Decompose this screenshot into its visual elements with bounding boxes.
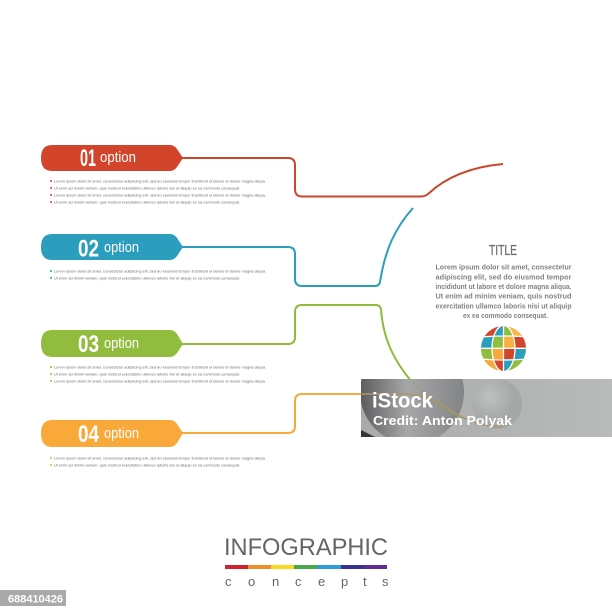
bullet text 01: Lorem ipsum dolor sit amet, consectetur adipiscing elit, sed do eiusmod tempor incididunt ut labore et dolore magna aliqua. bbox=[54, 193, 266, 197]
bullet text 04: Lorem ipsum dolor sit amet, consectetur adipiscing elit, sed do eiusmod tempor incididunt ut labore et dolore magna aliqua. bbox=[54, 456, 266, 460]
logo subheading: p bbox=[341, 574, 348, 589]
bullet text 03: Lorem ipsum dolor sit amet, consectetur adipiscing elit, sed do eiusmod tempor incididunt ut labore et dolore magna aliqua. bbox=[54, 365, 266, 369]
logo subheading: o bbox=[248, 574, 255, 589]
description text: adipiscing elit, sed do eiusmod tempor bbox=[436, 272, 572, 281]
label pill 03 bbox=[41, 330, 183, 357]
description text: exercitation ullamco laboris nisi ut aliquip bbox=[436, 301, 572, 310]
connector: orange bbox=[180, 394, 361, 433]
connector: blue bbox=[180, 208, 413, 286]
logo subheading: c bbox=[225, 574, 232, 589]
logo subheading: s bbox=[382, 574, 389, 589]
option label 02: option bbox=[104, 239, 139, 256]
bullet text 01: Ut enim ad minim veniam, quis nostrud exercitation ullamco laboris nisi ut aliquip ex ea commodo consequat. bbox=[54, 186, 240, 190]
logo subheading: c bbox=[295, 574, 302, 589]
rainbow bar bbox=[225, 565, 387, 569]
number 04: 04 bbox=[78, 421, 100, 448]
number 03: 03 bbox=[78, 331, 99, 358]
description text: Ut enim ad minim veniam, quis nostrud bbox=[436, 292, 572, 301]
bullet text 02 bbox=[50, 269, 266, 280]
panel: option 01 bbox=[41, 145, 266, 204]
bullet text 01: Lorem ipsum dolor sit amet, consectetur adipiscing elit, sed do eiusmod tempor incididunt ut labore et dolore magna aliqua. bbox=[54, 179, 266, 183]
logo: infographic concepts bbox=[224, 534, 389, 589]
description text bbox=[436, 262, 572, 320]
option label 03: option bbox=[104, 335, 139, 352]
panel: option 04 bbox=[41, 420, 266, 467]
label pill 01 bbox=[41, 145, 183, 171]
panel: option 02 bbox=[41, 234, 266, 280]
description text: Lorem ipsum dolor sit amet, consectetur bbox=[436, 262, 572, 272]
bullet text 04 bbox=[50, 456, 266, 467]
panel: option 03 bbox=[41, 330, 266, 383]
watermark banner bbox=[361, 379, 612, 437]
panel: title block bbox=[436, 242, 572, 372]
label pill 02 bbox=[41, 234, 183, 260]
bullet text 02: Ut enim ad minim veniam, quis nostrud exercitation ullamco laboris nisi ut aliquip ex ea commodo consequat. bbox=[54, 276, 240, 280]
bullet text 04: Ut enim ad minim veniam, quis nostrud exercitation ullamco laboris nisi ut aliquip ex ea commodo consequat. bbox=[54, 463, 240, 467]
logo subheading: n bbox=[272, 574, 279, 589]
icon: globe bbox=[481, 326, 526, 371]
bullet text 03: Lorem ipsum dolor sit amet, consectetur adipiscing elit, sed do eiusmod tempor incididunt ut labore et dolore magna aliqua. bbox=[54, 379, 266, 383]
logo subheading: t bbox=[363, 574, 367, 589]
connector: green bbox=[180, 305, 412, 382]
description text: incididunt ut labore et dolore magna aliqua. bbox=[436, 282, 572, 291]
logo heading: INFOGRAPHIC bbox=[224, 534, 388, 561]
title: TITLE bbox=[489, 242, 517, 259]
watermark credit: Credit: Anton Polyak bbox=[373, 414, 512, 428]
option label 04: option bbox=[104, 425, 139, 442]
logo subheading: e bbox=[318, 574, 325, 589]
bullet text 02: Lorem ipsum dolor sit amet, consectetur adipiscing elit, sed do eiusmod tempor incididunt ut labore et dolore magna aliqua. bbox=[54, 269, 266, 273]
bullet text 01: Ut enim ad minim veniam, quis nostrud exercitation ullamco laboris nisi ut aliquip ex ea commodo consequat. bbox=[54, 200, 240, 204]
number 02: 02 bbox=[78, 236, 99, 262]
description text: ex ea commodo consequat. bbox=[463, 311, 548, 320]
watermark text: iStock bbox=[372, 390, 433, 412]
image id badge bbox=[0, 590, 66, 606]
image id: 688410426 bbox=[8, 594, 63, 606]
label pill 04 bbox=[41, 420, 183, 447]
number 01: 01 bbox=[80, 145, 96, 172]
option label 01: option bbox=[100, 149, 136, 166]
logo subheading bbox=[225, 574, 389, 589]
bullet text 03: Ut enim ad minim veniam, quis nostrud exercitation ullamco laboris nisi ut aliquip ex ea commodo consequat. bbox=[54, 372, 240, 376]
connector: red bbox=[180, 158, 503, 196]
bullet text 01 bbox=[50, 179, 266, 204]
bullet text 03 bbox=[50, 365, 266, 383]
